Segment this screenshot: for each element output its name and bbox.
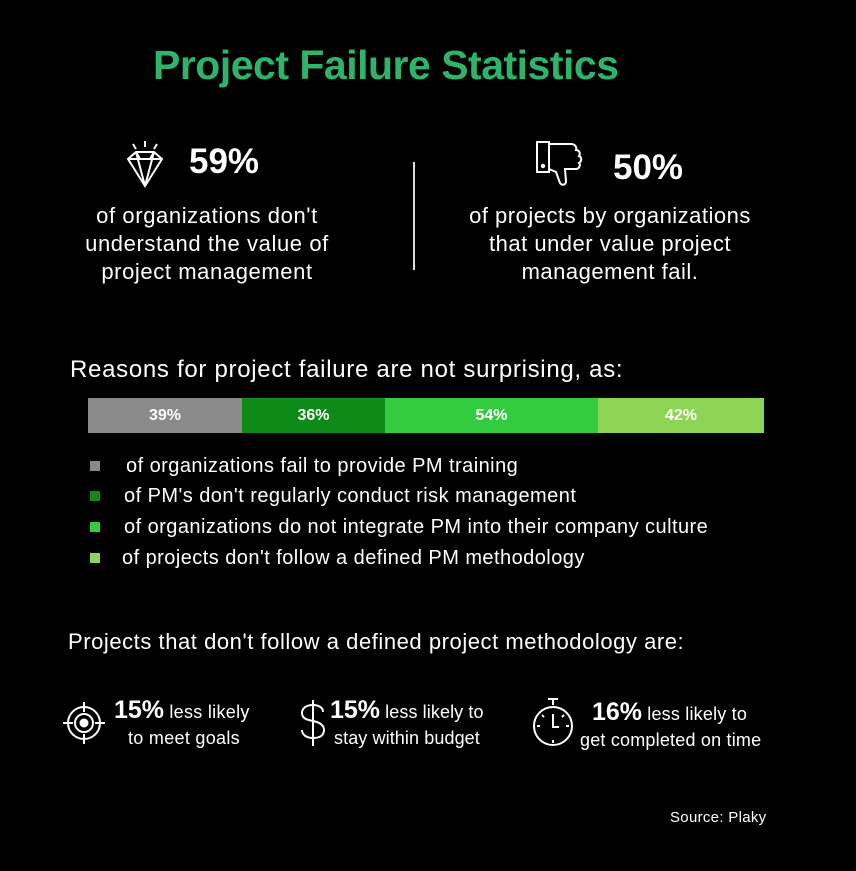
- text: management fail.: [522, 259, 698, 284]
- stat: time: [533, 698, 761, 750]
- legend: of organizations fail to provide PM training: [126, 455, 518, 477]
- stat: budget: 15% less likely to: [330, 696, 484, 724]
- stat: budget: [301, 696, 484, 748]
- stat: 59%: [85, 141, 329, 284]
- icon: thumbs down: [536, 141, 582, 186]
- icon: dollar: [301, 700, 325, 746]
- stat: goals: 15% less likely: [114, 696, 250, 724]
- title: Project Failure Statistics: [153, 42, 619, 88]
- source: Source: Plaky: [670, 809, 766, 826]
- stat: budget: stay within budget: [334, 728, 480, 748]
- stat: 50%: [469, 141, 751, 284]
- legend: of organizations do not integrate PM into their company culture: [124, 516, 708, 538]
- reasons heading: Reasons for project failure are not surprising, as:: [70, 356, 623, 383]
- stacked bar: 42%: [665, 407, 697, 424]
- stat: goals: [63, 696, 250, 748]
- text: of organizations don't: [96, 203, 318, 228]
- icon: target: [63, 702, 105, 744]
- text: [85, 203, 329, 284]
- text: [469, 203, 751, 284]
- legend: of PM's don't regularly conduct risk management: [124, 485, 576, 507]
- text: that under value project: [489, 231, 731, 256]
- stat: 59%: 59%: [189, 142, 259, 181]
- legend: of projects don't follow a defined PM methodology: [122, 547, 585, 569]
- text: project management: [101, 259, 313, 284]
- stacked bar: 36%: [297, 407, 330, 424]
- stacked bar: [88, 398, 764, 433]
- legend: [90, 455, 708, 569]
- methodology heading: Projects that don't follow a defined project methodology are:: [68, 629, 684, 654]
- icon: diamond: [126, 141, 164, 188]
- stat: time: get completed on time: [580, 730, 761, 750]
- text: of projects by organizations: [469, 203, 751, 228]
- stat: goals: to meet goals: [128, 728, 240, 748]
- stat: time: 16% less likely to: [592, 698, 747, 726]
- text: understand the value of: [85, 231, 329, 256]
- stacked bar: 39%: [149, 407, 181, 424]
- stacked bar: 54%: [475, 407, 508, 424]
- divider: [413, 162, 415, 270]
- stat: 50%: 50%: [613, 148, 683, 187]
- icon: stopwatch: [533, 698, 573, 746]
